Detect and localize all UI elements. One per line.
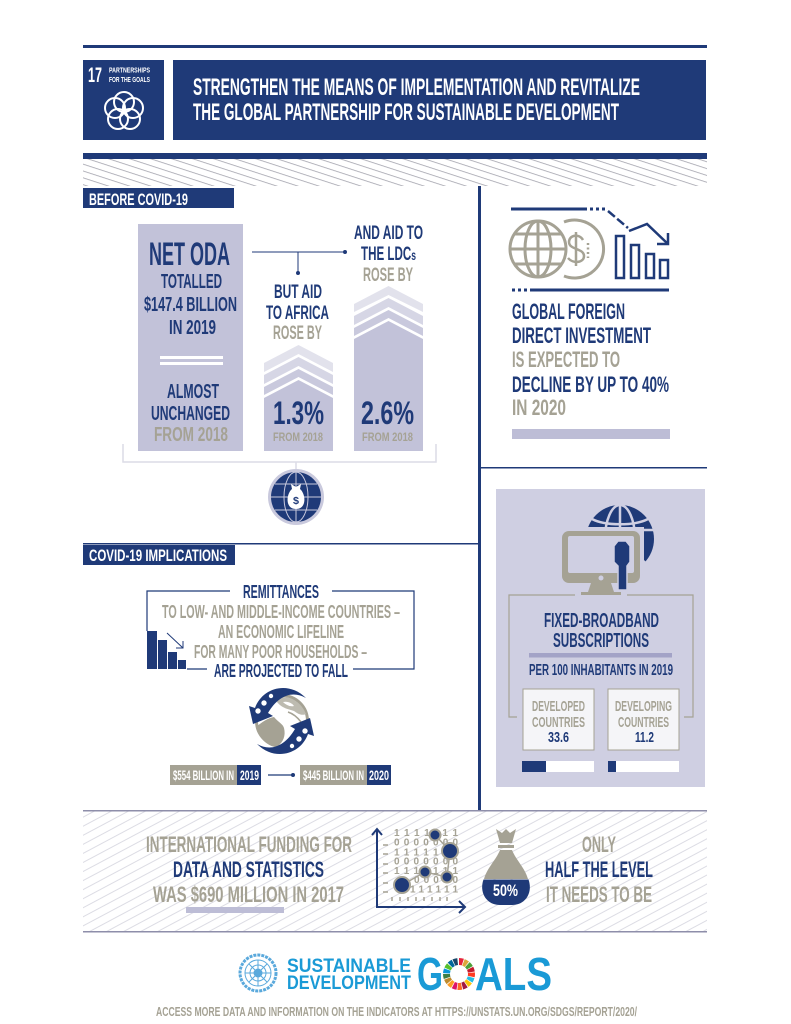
chart: data points: 1111 11 <box>394 828 458 839</box>
icon: un emblem <box>240 955 276 991</box>
text: international funding: WAS $690 MILLION IN 2017 <box>153 882 344 907</box>
card: developed countries: COUNTRIES <box>532 714 585 731</box>
text: half the level: ONLY <box>582 832 616 857</box>
goal badge: PARTNERSHIPS <box>109 68 150 74</box>
bar: developing 11.2 <box>608 761 679 772</box>
logo: sustainable development goals: ALS <box>475 948 552 1000</box>
logo: sustainable development goals <box>240 948 552 1000</box>
arrow bar: ldcs 2.6% <box>354 286 423 451</box>
panel: net oda: TOTALLED <box>161 271 222 293</box>
text: international funding: INTERNATIONAL FUNDING FOR <box>146 832 352 857</box>
card: developing countries <box>608 689 679 750</box>
icon: sdg colour wheel <box>441 956 477 992</box>
text: international funding <box>146 832 352 913</box>
bracket <box>123 444 436 470</box>
panel: fixed broadband: FIXED-BROADBAND <box>544 610 659 632</box>
goal badge: FOR THE GOALS <box>109 77 150 84</box>
logo: sustainable development goals: G <box>417 948 443 1000</box>
arrow bar: africa 1.3%: 1.3% <box>273 395 324 431</box>
icon: globe and monitor <box>558 505 660 599</box>
arrow bar: africa 1.3% <box>264 345 333 451</box>
text: aid to ldcs <box>354 223 423 286</box>
panel: fixed broadband: SUBSCRIPTIONS <box>553 630 649 652</box>
logo: sustainable development goals: DEVELOPMENT <box>287 972 411 994</box>
text: foreign direct investment: DIRECT INVESTMENT <box>512 323 651 348</box>
icon: half-filled money bag: 50% <box>493 881 518 900</box>
chart: data points: 1111111 <box>394 866 458 877</box>
text: international funding: DATA AND STATISTICS <box>173 857 324 882</box>
text: foreign direct investment: DECLINE BY UP TO 40% <box>512 372 669 397</box>
card: developed countries: 33.6 <box>548 729 569 746</box>
text: aid to africa: ROSE BY <box>273 323 322 344</box>
card: developed countries <box>523 689 594 750</box>
panel: net oda: ALMOST <box>167 381 219 403</box>
panel: fixed broadband <box>496 489 705 787</box>
panel: fixed broadband: PER 100 INHABITANTS IN 2019 <box>529 662 673 679</box>
callout: remittances: REMITTANCES <box>243 582 319 602</box>
arrow bar: africa 1.3%: FROM 2018 <box>273 430 323 444</box>
text: foreign direct investment: IS EXPECTED TO <box>512 347 620 372</box>
card: developing countries: DEVELOPING <box>615 698 672 715</box>
card: developing countries: COUNTRIES <box>618 714 669 731</box>
text: foreign direct investment: GLOBAL FOREIGN <box>512 299 625 324</box>
callout: remittances: TO LOW- AND MIDDLE-INCOME COUNTRIES – <box>162 602 400 622</box>
panel: net oda <box>138 224 243 451</box>
text: aid to africa: BUT AID <box>274 282 322 303</box>
text: aid to africa: TO AFRICA <box>266 303 329 324</box>
icon: globe with currency arrows <box>249 688 314 754</box>
icon: globe with money bag: $ <box>293 496 299 507</box>
icon: globe, coin and declining chart <box>510 209 669 290</box>
text: half the level: HALF THE LEVEL <box>545 857 653 882</box>
panel: net oda: IN 2019 <box>169 317 216 339</box>
icon: falling bars <box>147 631 186 669</box>
text: foreign direct investment: IN 2020 <box>512 395 566 420</box>
goal badge <box>83 60 164 140</box>
label: $554 billion in 2019: $554 BILLION IN <box>173 767 234 783</box>
card: developing countries: 11.2 <box>635 729 654 746</box>
connector lines <box>252 250 346 274</box>
label: $445 billion in 2020: 2020 <box>369 767 389 783</box>
chart: data points: 111111 <box>410 884 458 896</box>
chart: data points: 00000 <box>414 875 458 886</box>
text: aid to ldcs: AND AID TO <box>354 223 423 244</box>
panel: net oda: NET ODA <box>149 236 230 272</box>
callout: remittances: AN ECONOMIC LIFELINE <box>218 622 344 642</box>
text: foreign direct investment <box>512 299 670 439</box>
text: half the level: IT NEEDS TO BE <box>546 882 652 907</box>
arrow bar: ldcs 2.6%: 2.6% <box>361 395 414 431</box>
title banner <box>173 60 706 140</box>
bar: developed 33.6 <box>522 761 594 772</box>
icon: half-filled money bag <box>482 829 530 905</box>
callout: remittances: FOR MANY POOR HOUSEHOLDS – <box>194 642 367 662</box>
panel: net oda: FROM 2018 <box>154 424 228 446</box>
callout: remittances: ARE PROJECTED TO FALL <box>214 661 348 681</box>
text: aid to africa <box>266 282 329 344</box>
text: half the level <box>545 832 653 907</box>
label: $445 billion in 2020: $445 BILLION IN <box>303 767 364 783</box>
section heading: covid-19 implications <box>83 545 235 565</box>
panel: data and statistics funding <box>83 810 707 932</box>
card: developed countries: DEVELOPED <box>532 698 585 715</box>
icon: globe with money bag <box>268 469 324 525</box>
text: aid to ldcs: ROSE BY <box>363 265 413 286</box>
section heading: covid-19 implications: COVID-19 IMPLICATIONS <box>89 546 227 565</box>
chart: data points: 0000000 <box>394 856 458 868</box>
arrow bar: ldcs 2.6%: FROM 2018 <box>362 430 413 444</box>
chart: data points <box>372 828 465 913</box>
label: $554 billion in 2019: 2019 <box>240 767 259 783</box>
section heading: before covid-19: BEFORE COVID-19 <box>89 190 188 209</box>
label: $445 billion in 2020 <box>300 765 391 785</box>
arrow: remittance decline <box>268 773 295 777</box>
chart: data points: 1111111 <box>394 848 458 858</box>
panel: net oda: $147.4 BILLION <box>144 294 237 316</box>
text: aid to ldcs: THE LDCs <box>361 244 416 265</box>
panel: net oda: UNCHANGED <box>151 403 230 425</box>
callout: remittances <box>147 582 414 681</box>
goal badge: 17 <box>88 64 102 87</box>
chart: data points: 0000000 <box>394 838 458 848</box>
logo: sustainable development goals: SUSTAINABLE <box>287 955 411 977</box>
label: $554 billion in 2019 <box>170 765 261 785</box>
